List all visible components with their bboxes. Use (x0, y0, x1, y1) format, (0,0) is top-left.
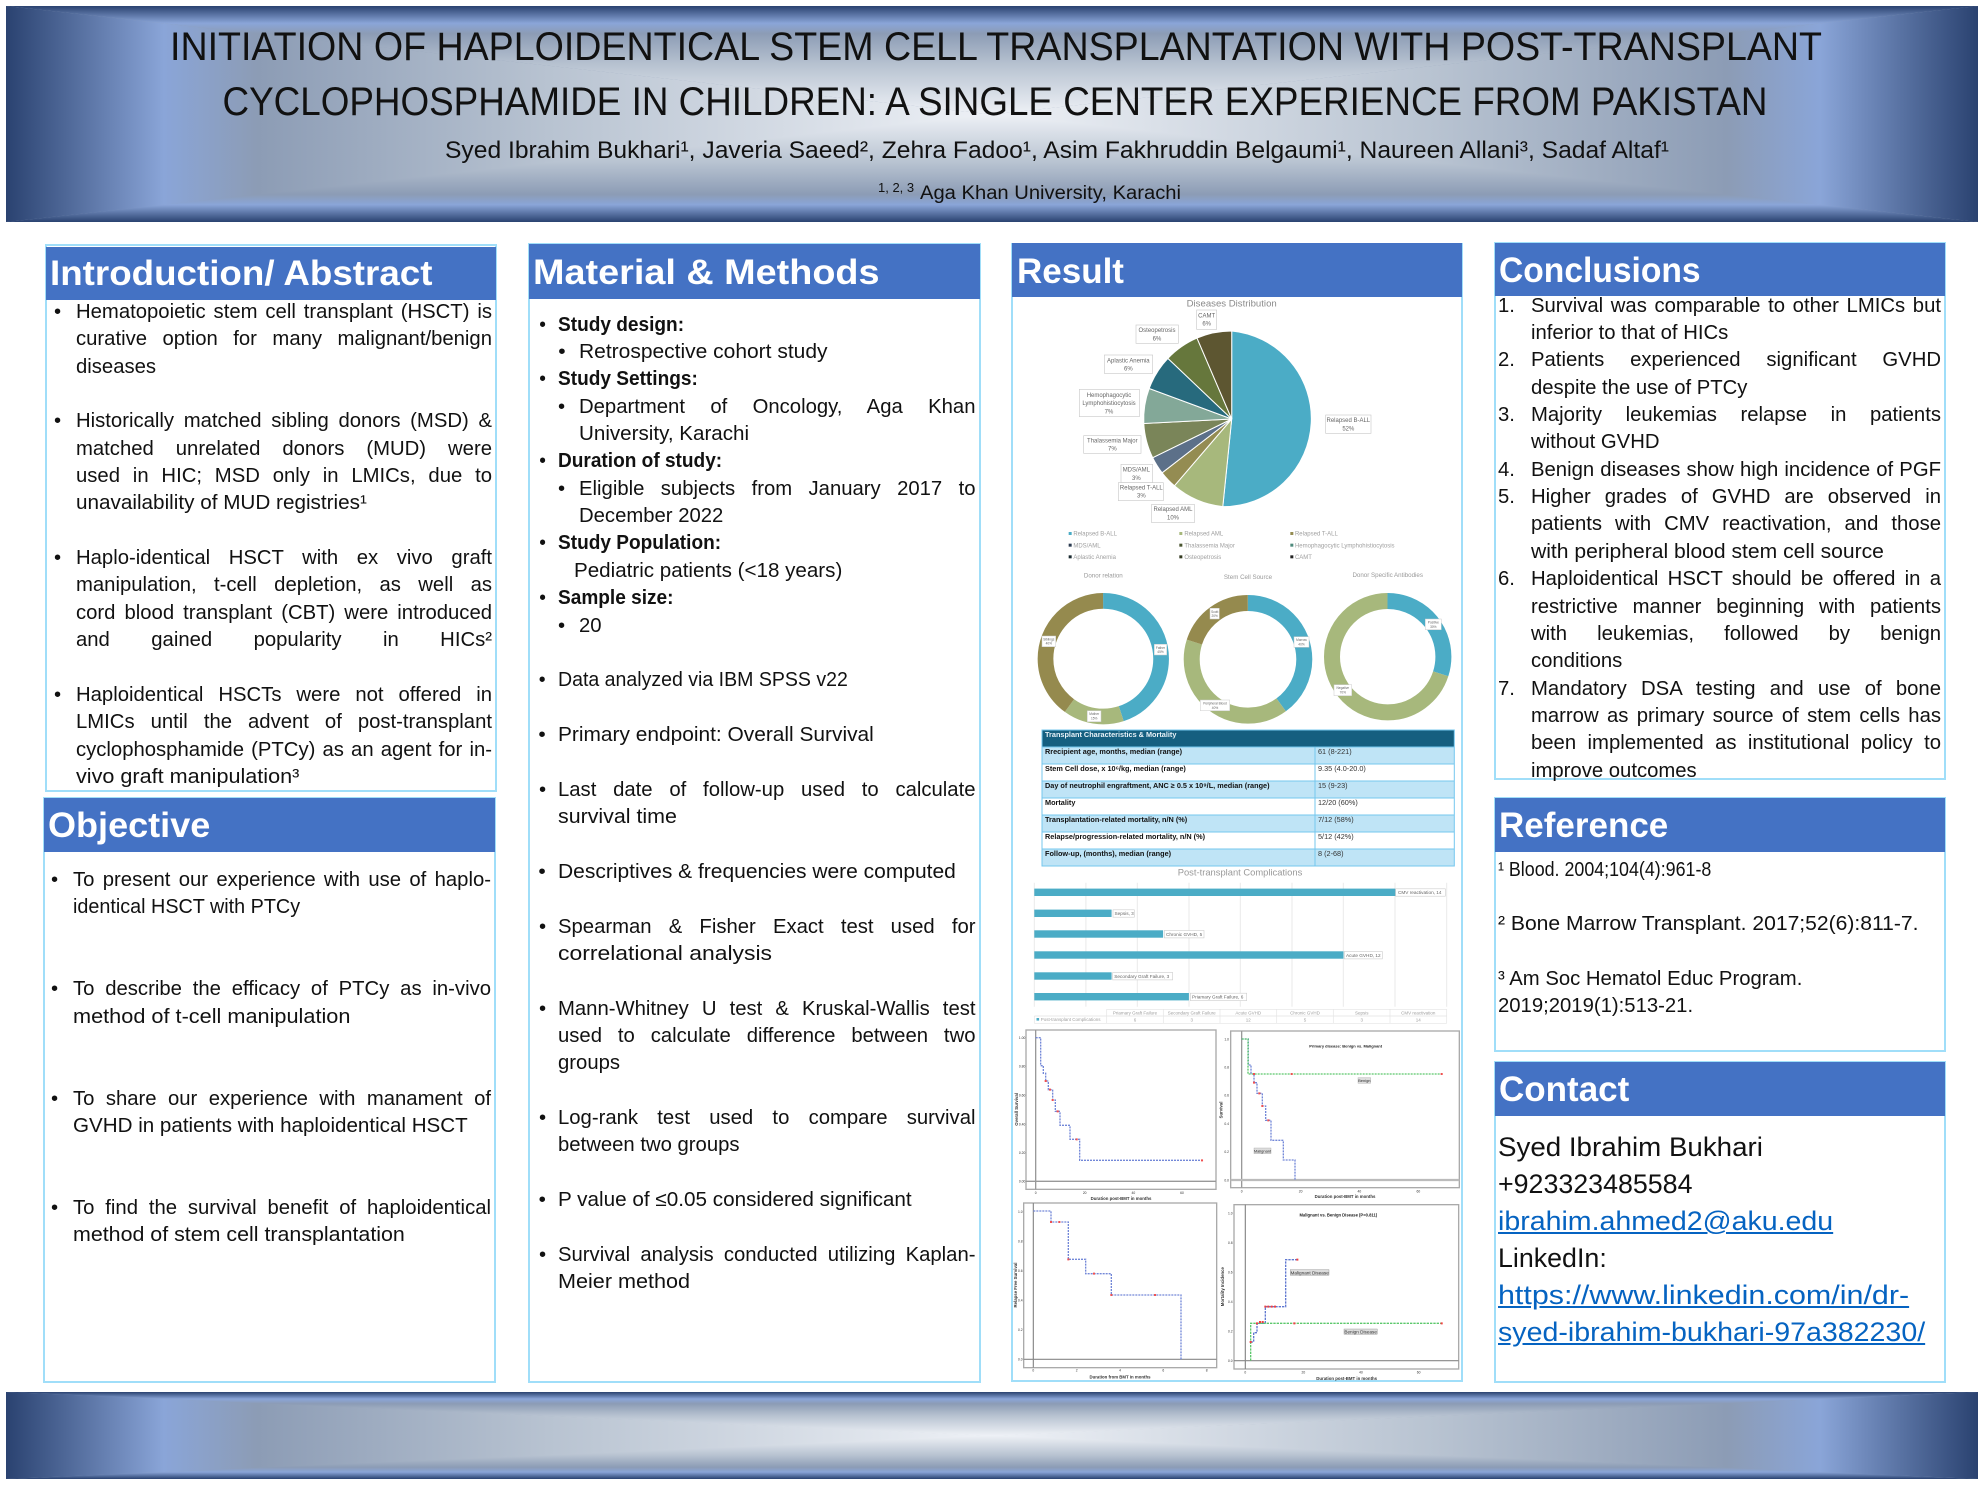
text: references list: ² Bone Marrow Transplant. 2017;52(6):811-7. (1498, 913, 1919, 935)
chart: malignant vs benign mortality incidence: Duration post-BMT in months (1316, 1376, 1378, 1381)
chart: relapse free survival curve: 4 (1119, 1369, 1121, 1373)
text: contact details: syed-ibrahim-bukhari-97a382230/ (1498, 1317, 1925, 1347)
text: numbered conclusions: inferior to that of HICs (1531, 322, 1728, 344)
text: introduction bullets: vivo graft manipulation³ (76, 766, 299, 788)
panel: conclusions: 4. (1498, 459, 1515, 481)
text: methods bullets: • (558, 478, 565, 500)
text: objective bullets: To find the survival benefit of haploidentical (73, 1197, 491, 1219)
chart: relapse free survival curve: 2 (1076, 1369, 1078, 1373)
chart: overall survival curve: 20 (1083, 1191, 1087, 1195)
text: contact details: LinkedIn: (1498, 1243, 1607, 1273)
text: methods bullets: • (558, 341, 566, 363)
text: objective bullets: identical HSCT with PTCy (73, 896, 300, 918)
chart: primary disease benign vs malignant survival: Primary disease: Benign vs. Malignant (1309, 1044, 1383, 1049)
chart: relapse free survival curve: Relapse Free Survival (1013, 1262, 1018, 1307)
text: numbered conclusions: Survival was comparable to other LMICs but (1531, 295, 1941, 317)
pie legend (1069, 532, 1395, 561)
chart: overall survival curve: 0.40 (1019, 1122, 1025, 1126)
text: numbered conclusions: Benign diseases show high incidence of PGF (1531, 459, 1941, 481)
chart: primary disease benign vs malignant survival: 20 (1299, 1189, 1303, 1193)
text: numbered conclusions: been implemented as institutional policy to (1531, 732, 1941, 754)
chart: post-transplant complications bars: Sepsis, 3 (1114, 911, 1134, 916)
chart: malignant vs benign mortality incidence: 1.0 (1228, 1212, 1233, 1216)
text: introduction bullets: Haploidentical HSCTs were not offered in (76, 684, 492, 706)
complications data table: Sepsis (1355, 1010, 1369, 1016)
text: introduction bullets (54, 301, 492, 788)
text: methods bullets (538, 314, 976, 1293)
chart: donor relation donut: 15% (1091, 717, 1098, 721)
complications data table: Priamary Graft Failure (1113, 1010, 1158, 1016)
text: introduction bullets: Hematopoietic stem cell transplant (HSCT) is (76, 301, 492, 323)
chart: donor relation donut (1042, 572, 1167, 722)
panel: material and methods: • (539, 916, 546, 938)
text: introduction bullets: matched unrelated donors (MUD) were (76, 438, 492, 460)
heading: result (1012, 243, 1462, 297)
panel: objective: • (51, 869, 58, 891)
heading: introduction / abstract (46, 247, 496, 300)
chart: stem cell source donut: 40% (1212, 706, 1218, 710)
chart: donor specific antibodies donut (1332, 572, 1443, 712)
text: objective bullets: To share our experience with manament of (73, 1088, 491, 1110)
text: introduction bullets: used in HIC; MSD only in LMICs, due to (76, 465, 492, 487)
table: transplant characteristics and mortality: 5/12 (42%) (1318, 832, 1354, 841)
heading: contact: Contact (1499, 1070, 1629, 1109)
pie labels: CAMT (1198, 313, 1215, 319)
text: methods bullets: correlational analysis (558, 943, 772, 965)
panel: objective (43, 797, 496, 1383)
chart: donor relation donut: Donor relation (1084, 572, 1123, 580)
text: methods bullets: Retrospective cohort study (579, 341, 828, 363)
chart: malignant vs benign mortality incidence: Malignant vs. Benign Disease (P=0.811) (1299, 1213, 1378, 1218)
panel: material and methods: • (539, 1189, 546, 1211)
text: numbered conclusions: Majority leukemias relapse in patients (1531, 404, 1941, 426)
text: methods bullets: December 2022 (579, 505, 723, 527)
text: references list (1498, 859, 1919, 1017)
panel: material and methods: • (539, 368, 546, 390)
pie labels: 10% (1167, 515, 1180, 521)
text: methods bullets: Study Settings: (558, 368, 698, 390)
heading: material and methods (529, 244, 980, 299)
pie labels: 6% (1124, 367, 1133, 373)
chart: primary disease benign vs malignant survival: 0.0 (1224, 1178, 1229, 1182)
chart: donor specific antibodies donut: Negative (1337, 686, 1349, 690)
text: introduction bullets: Haplo-identical HSCT with ex vivo graft (76, 547, 492, 569)
text: objective bullets: method of stem cell transplantation (73, 1224, 405, 1246)
heading: material and methods: Material & Methods (533, 253, 880, 292)
complications data table: 5 (1304, 1018, 1307, 1022)
chart: overall survival curve: 0 (1035, 1191, 1037, 1195)
text: contact details: ibrahim.ahmed2@aku.edu (1498, 1206, 1833, 1236)
text: contact details: +923323485584 (1498, 1169, 1692, 1199)
panel: objective: • (51, 1197, 58, 1219)
table: transplant characteristics and mortality: 12/20 (60%) (1318, 798, 1358, 807)
heading: reference: Reference (1499, 806, 1668, 845)
table: transplant characteristics and mortality: 8 (2-68) (1318, 849, 1344, 858)
text: methods bullets: • (558, 615, 565, 637)
text: numbered conclusions: Mandatory DSA testing and use of bone (1531, 678, 1941, 700)
affiliation: 1, 2, 3 (878, 180, 914, 195)
table: transplant characteristics and mortality: Transplantation-related mortality, n/N (%) (1045, 815, 1188, 824)
table: transplant characteristics and mortality: 9.35 (4.0-20.0) (1318, 764, 1366, 773)
panel: introduction / abstract: • (54, 547, 61, 569)
affiliation: Aga Khan University, Karachi (920, 183, 1181, 204)
panel: material and methods: • (538, 861, 546, 883)
heading: reference (1495, 798, 1945, 852)
chart: post-transplant complications bars: Chronic GVHD, 5 (1166, 932, 1203, 937)
chart: primary disease benign vs malignant survival: 0 (1241, 1189, 1243, 1193)
text: methods bullets: Data analyzed via IBM SPSS v22 (558, 669, 848, 691)
text: numbered conclusions: patients with CMV reactivation, and those (1531, 513, 1941, 535)
chart: stem cell source donut (1192, 574, 1309, 716)
text: methods bullets: Duration of study: (558, 450, 722, 472)
table: transplant characteristics and mortality: Rrecipient age, months, median (range) (1045, 747, 1183, 756)
panel: contact (1494, 1061, 1946, 1383)
text: numbered conclusions: conditions (1531, 650, 1622, 672)
complications data table: 14 (1416, 1018, 1421, 1022)
text: references list: ³ Am Soc Hematol Educ Program. (1498, 968, 1802, 990)
panel: material and methods: • (539, 314, 546, 336)
pie labels: 52% (1342, 426, 1355, 432)
text: methods bullets: P value of ≤0.05 considered significant (558, 1189, 912, 1211)
table: transplant characteristics and mortality: Relapse/progression-related mortality, n/N (%) (1045, 832, 1206, 841)
panel: objective: • (51, 1088, 58, 1110)
chart: primary disease benign vs malignant survival: Survival (1218, 1102, 1223, 1118)
text: methods bullets: Sample size: (558, 587, 674, 609)
pie labels: 7% (1108, 447, 1117, 453)
heading: conclusions (1495, 243, 1945, 296)
pie legend: Hemophagocytic Lymphohistiocytosis (1295, 543, 1395, 549)
pie legend: Osteopetrosis (1184, 555, 1221, 561)
panel: material and methods: • (539, 1244, 546, 1266)
title: CYCLOPHOSPHAMIDE IN CHILDREN: A SINGLE CENTER EXPERIENCE FROM PAKISTAN (222, 80, 1768, 124)
table: transplant characteristics and mortality: 61 (8-221) (1318, 747, 1352, 756)
chart: malignant vs benign mortality incidence (1220, 1205, 1459, 1381)
panel: material and methods: • (539, 587, 546, 609)
text: numbered conclusions: marrow as primary source of stem cells has (1531, 705, 1941, 727)
panel: conclusions: 7. (1498, 678, 1515, 700)
chart: stem cell source donut: Peripheral Blood (1203, 702, 1227, 706)
chart: malignant vs benign mortality incidence: 0.4 (1228, 1300, 1233, 1304)
pie legend: Relapsed B-ALL (1073, 532, 1118, 538)
text: introduction bullets: cord blood transplant (CBT) were introduced (76, 602, 492, 624)
text: methods bullets: • (558, 396, 565, 418)
panel: introduction / abstract: • (54, 410, 61, 432)
text: objective bullets: To present our experience with use of haplo- (73, 869, 491, 891)
chart: donor specific antibodies donut: 70% (1340, 691, 1346, 695)
heading: introduction / abstract: Introduction/ Abstract (50, 254, 432, 293)
panel: conclusions: 6. (1498, 568, 1515, 590)
chart: stem cell source donut: Marrow (1296, 638, 1308, 642)
pie legend: Relapsed AML (1184, 532, 1224, 538)
chart: malignant vs benign mortality incidence: 0.2 (1228, 1330, 1233, 1334)
chart: malignant vs benign mortality incidence: 0.6 (1228, 1271, 1233, 1275)
heading: conclusions: Conclusions (1499, 251, 1701, 290)
text: objective bullets: To describe the efficacy of PTCy as in-vivo (73, 978, 491, 1000)
panel: conclusions (1494, 242, 1946, 780)
text: numbered conclusions: Higher grades of GVHD are observed in (1531, 486, 1941, 508)
chart: relapse free survival curve: 0.0 (1018, 1358, 1023, 1362)
pie legend: Relapsed T-ALL (1295, 532, 1338, 538)
chart: overall survival curve: 0.20 (1019, 1151, 1025, 1155)
text: methods bullets: survival time (558, 806, 677, 828)
chart: relapse free survival curve: 0.2 (1018, 1328, 1023, 1332)
chart: malignant vs benign mortality incidence: Benign Disease (1344, 1329, 1377, 1334)
chart: primary disease benign vs malignant survival: 40 (1357, 1189, 1361, 1193)
panel: material and methods: • (538, 724, 546, 746)
table: transplant characteristics and mortality: 7/12 (58%) (1318, 815, 1354, 824)
pie legend: Thalassemia Major (1184, 543, 1235, 549)
text: numbered conclusions: with peripheral blood stem cell source (1531, 541, 1884, 563)
chart: post-transplant complications bars: Post-transplant Complications (1178, 866, 1303, 878)
complications data table: 3 (1190, 1018, 1193, 1022)
text: methods bullets: Department of Oncology, Aga Khan (579, 396, 976, 418)
chart: malignant vs benign mortality incidence: Malignant Disease (1291, 1270, 1329, 1275)
text: methods bullets: Descriptives & frequencies were computed (558, 861, 956, 883)
panel: material and methods: • (539, 450, 546, 472)
text: contact details (1498, 1132, 1926, 1347)
chart: relapse free survival curve: 1.0 (1018, 1210, 1023, 1214)
text: objective bullets: method of t-cell manipulation (73, 1006, 350, 1028)
chart: malignant vs benign mortality incidence: 0 (1244, 1370, 1246, 1374)
text: introduction bullets: manipulation, t-cell depletion, as well as (76, 574, 492, 596)
chart: primary disease benign vs malignant survival: 0.2 (1224, 1150, 1229, 1154)
chart: overall survival curve: Overall Survival (1014, 1093, 1019, 1126)
text: methods bullets: Eligible subjects from January 2017 to (579, 478, 976, 500)
chart: malignant vs benign mortality incidence: 40 (1359, 1370, 1363, 1374)
table: transplant characteristics and mortality: Day of neutrophil engraftment, ANC ≥ 0.5 x 10⁹/L, median (range) (1045, 781, 1270, 790)
panel: conclusions: 2. (1498, 349, 1515, 371)
chart: overall survival curve (1014, 1030, 1216, 1201)
top title banner (6, 6, 1978, 222)
chart: donor relation donut: Mother (1089, 712, 1100, 716)
chart: relapse free survival curve (1013, 1203, 1217, 1379)
chart: primary disease benign vs malignant survival: Malignant (1254, 1148, 1272, 1153)
chart: primary disease benign vs malignant survival: Duration post-BMT in months (1315, 1194, 1376, 1199)
pie labels: 7% (1105, 410, 1114, 416)
chart: overall survival curve: 1.00 (1019, 1036, 1025, 1040)
chart: relapse free survival curve: 6 (1162, 1369, 1164, 1373)
panel: material and methods (528, 243, 981, 1383)
panel: material and methods: • (539, 669, 546, 691)
chart: primary disease benign vs malignant survival: Benign (1358, 1078, 1371, 1083)
text: methods bullets: between two groups (558, 1134, 740, 1156)
text: methods bullets: Log-rank test used to compare survival (558, 1107, 976, 1129)
chart: donor specific antibodies donut: Positive (1428, 620, 1439, 624)
table: transplant characteristics and mortality: Transplant Characteristics & Mortality (1045, 730, 1177, 739)
text: introduction bullets: cyclophosphamide (PTCy) as an agent for in- (76, 739, 492, 761)
text: numbered conclusions: Haploidentical HSCT should be offered in a (1531, 568, 1941, 590)
complications data table: 6 (1134, 1018, 1137, 1022)
chart: overall survival curve: Duration post-BMT in months (1091, 1196, 1152, 1201)
chart: primary disease benign vs malignant survival (1218, 1031, 1459, 1199)
text: introduction bullets: unavailability of MUD registries¹ (76, 492, 367, 514)
text: methods bullets: Survival analysis conducted utilizing Kaplan- (558, 1244, 976, 1266)
table: transplant characteristics and mortality: Stem Cell dose, x 10⁶/kg, median (range) (1045, 764, 1186, 773)
table: transplant characteristics and mortality (1042, 730, 1454, 866)
chart: stem cell source donut: Stem Cell Source (1224, 574, 1273, 581)
chart: primary disease benign vs malignant survival: 60 (1416, 1189, 1420, 1193)
panel: conclusions: 5. (1498, 486, 1515, 508)
complications data table: Acute GVHD (1235, 1010, 1262, 1016)
pie legend: Aplastic Anemia (1073, 555, 1117, 561)
chart: primary disease benign vs malignant survival: 1.0 (1224, 1037, 1229, 1041)
text: methods bullets: Mann-Whitney U test & Kruskal-Wallis test (558, 998, 976, 1020)
chart: overall survival curve: 40 (1131, 1191, 1135, 1195)
pie labels: 3% (1137, 494, 1146, 500)
panel: result (1011, 243, 1463, 1382)
chart: donor relation donut: Siblings (1043, 638, 1055, 642)
table: transplant characteristics and mortality: Follow-up, (months), median (range) (1045, 849, 1172, 858)
panel: material and methods: • (539, 532, 546, 554)
pie labels: 6% (1202, 322, 1212, 328)
text: numbered conclusions: restrictive manner beginning with patients (1531, 596, 1941, 618)
chart: stem cell source donut: 40% (1298, 642, 1305, 646)
text: numbered conclusions: improve outcomes (1531, 760, 1697, 782)
text: numbered conclusions: without GVHD (1531, 431, 1660, 453)
panel: material and methods: • (539, 998, 546, 1020)
chart: overall survival curve: 0.00 (1019, 1180, 1025, 1184)
chart: primary disease benign vs malignant survival: 0.4 (1224, 1122, 1229, 1126)
chart: relapse free survival curve: 0.6 (1018, 1269, 1023, 1273)
chart: malignant vs benign mortality incidence: 0.0 (1228, 1359, 1233, 1363)
text: methods bullets: used to calculate difference between two (558, 1025, 976, 1047)
chart: diseases distribution pie: Diseases Distribution (1187, 298, 1277, 310)
complications data table: Secondary Graft Failure (1168, 1010, 1216, 1016)
text: contact details: https://www.linkedin.com/in/dr- (1498, 1280, 1909, 1310)
chart: donor relation donut: Father (1156, 646, 1166, 650)
panel: material and methods: • (539, 1107, 546, 1129)
heading: result: Result (1017, 252, 1124, 291)
table: transplant characteristics and mortality: 15 (9-23) (1318, 781, 1348, 790)
chart: stem cell source donut: 20% (1212, 614, 1218, 618)
chart: donor relation donut: 45% (1157, 650, 1164, 654)
chart: primary disease benign vs malignant survival: 0.8 (1224, 1066, 1229, 1070)
text: methods bullets: Study design: (558, 314, 684, 336)
panel: introduction / abstract: • (54, 301, 61, 323)
text: methods bullets: Last date of follow-up used to calculate (558, 779, 976, 801)
text: introduction bullets: LMICs until the advent of post-transplant (76, 711, 492, 733)
pie labels: Relapsed T-ALL (1120, 485, 1163, 491)
pie labels: Lymphohistiocytosis (1082, 401, 1136, 407)
text: introduction bullets: and gained popularity in HICs² (76, 629, 492, 651)
text: numbered conclusions: despite the use of PTCy (1531, 377, 1747, 399)
text: methods bullets: groups (558, 1052, 620, 1074)
chart: relapse free survival curve: 0.4 (1018, 1299, 1023, 1303)
chart: relapse free survival curve: 0.8 (1018, 1239, 1023, 1243)
text: methods bullets: Spearman & Fisher Exact test used for (558, 916, 976, 938)
text: numbered conclusions: Patients experienced significant GVHD (1531, 349, 1941, 371)
pie labels: Thalassemia Major (1087, 438, 1138, 444)
chart: donor specific antibodies donut: 30% (1430, 625, 1437, 629)
chart: malignant vs benign mortality incidence: 60 (1417, 1370, 1421, 1374)
chart: primary disease benign vs malignant survival: 0.6 (1224, 1094, 1229, 1098)
pie labels (1079, 310, 1371, 523)
heading: objective: Objective (48, 806, 210, 845)
panel: objective: • (51, 978, 58, 1000)
chart: malignant vs benign mortality incidence: 20 (1301, 1370, 1305, 1374)
pie labels: Aplastic Anemia (1107, 358, 1150, 364)
chart: post-transplant complications bars: Secondary Graft Failure, 3 (1114, 974, 1170, 979)
chart: malignant vs benign mortality incidence: 0.8 (1228, 1241, 1233, 1245)
chart: donor specific antibodies donut: Donor Specific Antibodies (1352, 572, 1423, 579)
text: methods bullets: Meier method (558, 1271, 690, 1293)
panel: conclusions: 3. (1498, 404, 1515, 426)
pie labels: 6% (1153, 336, 1162, 342)
text: numbered conclusions (1498, 295, 1942, 782)
pie labels: Osteopetrosis (1139, 328, 1175, 334)
text: methods bullets: Primary endpoint: Overall Survival (558, 724, 874, 746)
panel: reference (1494, 797, 1946, 1052)
chart: diseases distribution pie (1069, 298, 1395, 561)
pie labels: 3% (1132, 476, 1141, 482)
complications data table (1034, 1009, 1447, 1023)
bottom decorative banner (6, 1392, 1978, 1479)
text: objective bullets (51, 869, 492, 1246)
pie labels: Relapsed B-ALL (1327, 418, 1371, 424)
chart: overall survival curve: 0.60 (1019, 1094, 1025, 1098)
text: methods bullets: University, Karachi (579, 423, 749, 445)
pie labels: Hemophagocytic (1087, 393, 1131, 399)
chart: malignant vs benign mortality incidence: Mortality Incidence (1220, 1266, 1225, 1306)
title (170, 25, 1822, 124)
pie legend: MDS/AML (1073, 543, 1101, 549)
text: methods bullets: Study Population: (558, 532, 721, 554)
title: INITIATION OF HAPLOIDENTICAL STEM CELL TRANSPLANTATION WITH POST-TRANSPLANT (170, 25, 1822, 69)
panel: introduction / abstract (45, 244, 497, 792)
text: introduction bullets: Historically matched sibling donors (MSD) & (76, 410, 492, 432)
pie labels: Relapsed AML (1154, 507, 1193, 513)
text: methods bullets: 20 (579, 615, 602, 637)
panel: material and methods: • (539, 779, 546, 801)
text: methods bullets: Pediatric patients (<18 years) (574, 560, 842, 582)
panel: introduction / abstract: • (54, 684, 61, 706)
text: contact details: Syed Ibrahim Bukhari (1498, 1132, 1763, 1162)
table: transplant characteristics and mortality: Mortality (1045, 798, 1076, 807)
text: numbered conclusions: with leukemias, followed by benign (1531, 623, 1941, 645)
complications data table: 3 (1360, 1018, 1363, 1022)
chart: relapse free survival curve: 0 (1032, 1369, 1034, 1373)
complications data table: Chronic GVHD (1290, 1010, 1321, 1016)
chart: relapse free survival curve: Duration from BMT in months (1089, 1374, 1151, 1379)
chart: post-transplant complications bars: CMV reactivation, 14 (1398, 890, 1442, 895)
heading: objective (44, 798, 495, 852)
text: objective bullets: GVHD in patients with haploidentical HSCT (73, 1115, 468, 1137)
chart: overall survival curve: 0.80 (1019, 1065, 1025, 1069)
authors: Syed Ibrahim Bukhari¹, Javeria Saeed², Zehra Fadoo¹, Asim Fakhruddin Belgaumi¹, Naureen Allani³, Sadaf Altaf¹ (445, 137, 1669, 164)
text: introduction bullets: curative option for many malignant/benign (76, 328, 492, 350)
panel: conclusions: 1. (1498, 295, 1515, 317)
complications data table: Post-transplant Complications (1041, 1017, 1101, 1022)
chart: relapse free survival curve: 8 (1206, 1369, 1208, 1373)
chart: post-transplant complications bars: Priamary Graft Failure, 6 (1192, 995, 1244, 1000)
chart: donor relation donut: 40% (1046, 642, 1052, 646)
chart: overall survival curve: 60 (1180, 1191, 1184, 1195)
text: introduction bullets: diseases (76, 356, 156, 378)
chart: stem cell source donut: Scott (1211, 610, 1218, 614)
complications data table: 12 (1246, 1018, 1251, 1022)
pie legend: CAMT (1295, 555, 1312, 561)
chart: post-transplant complications bars (1034, 866, 1447, 1023)
text: references list: ¹ Blood. 2004;104(4):961-8 (1498, 859, 1711, 881)
heading: contact (1495, 1062, 1945, 1116)
chart: post-transplant complications bars: Acute GVHD, 12 (1346, 953, 1381, 958)
pie labels: MDS/AML (1123, 468, 1151, 474)
text: references list: 2019;2019(1):513-21. (1498, 995, 1693, 1017)
complications data table: CMV reactivation (1401, 1010, 1436, 1016)
